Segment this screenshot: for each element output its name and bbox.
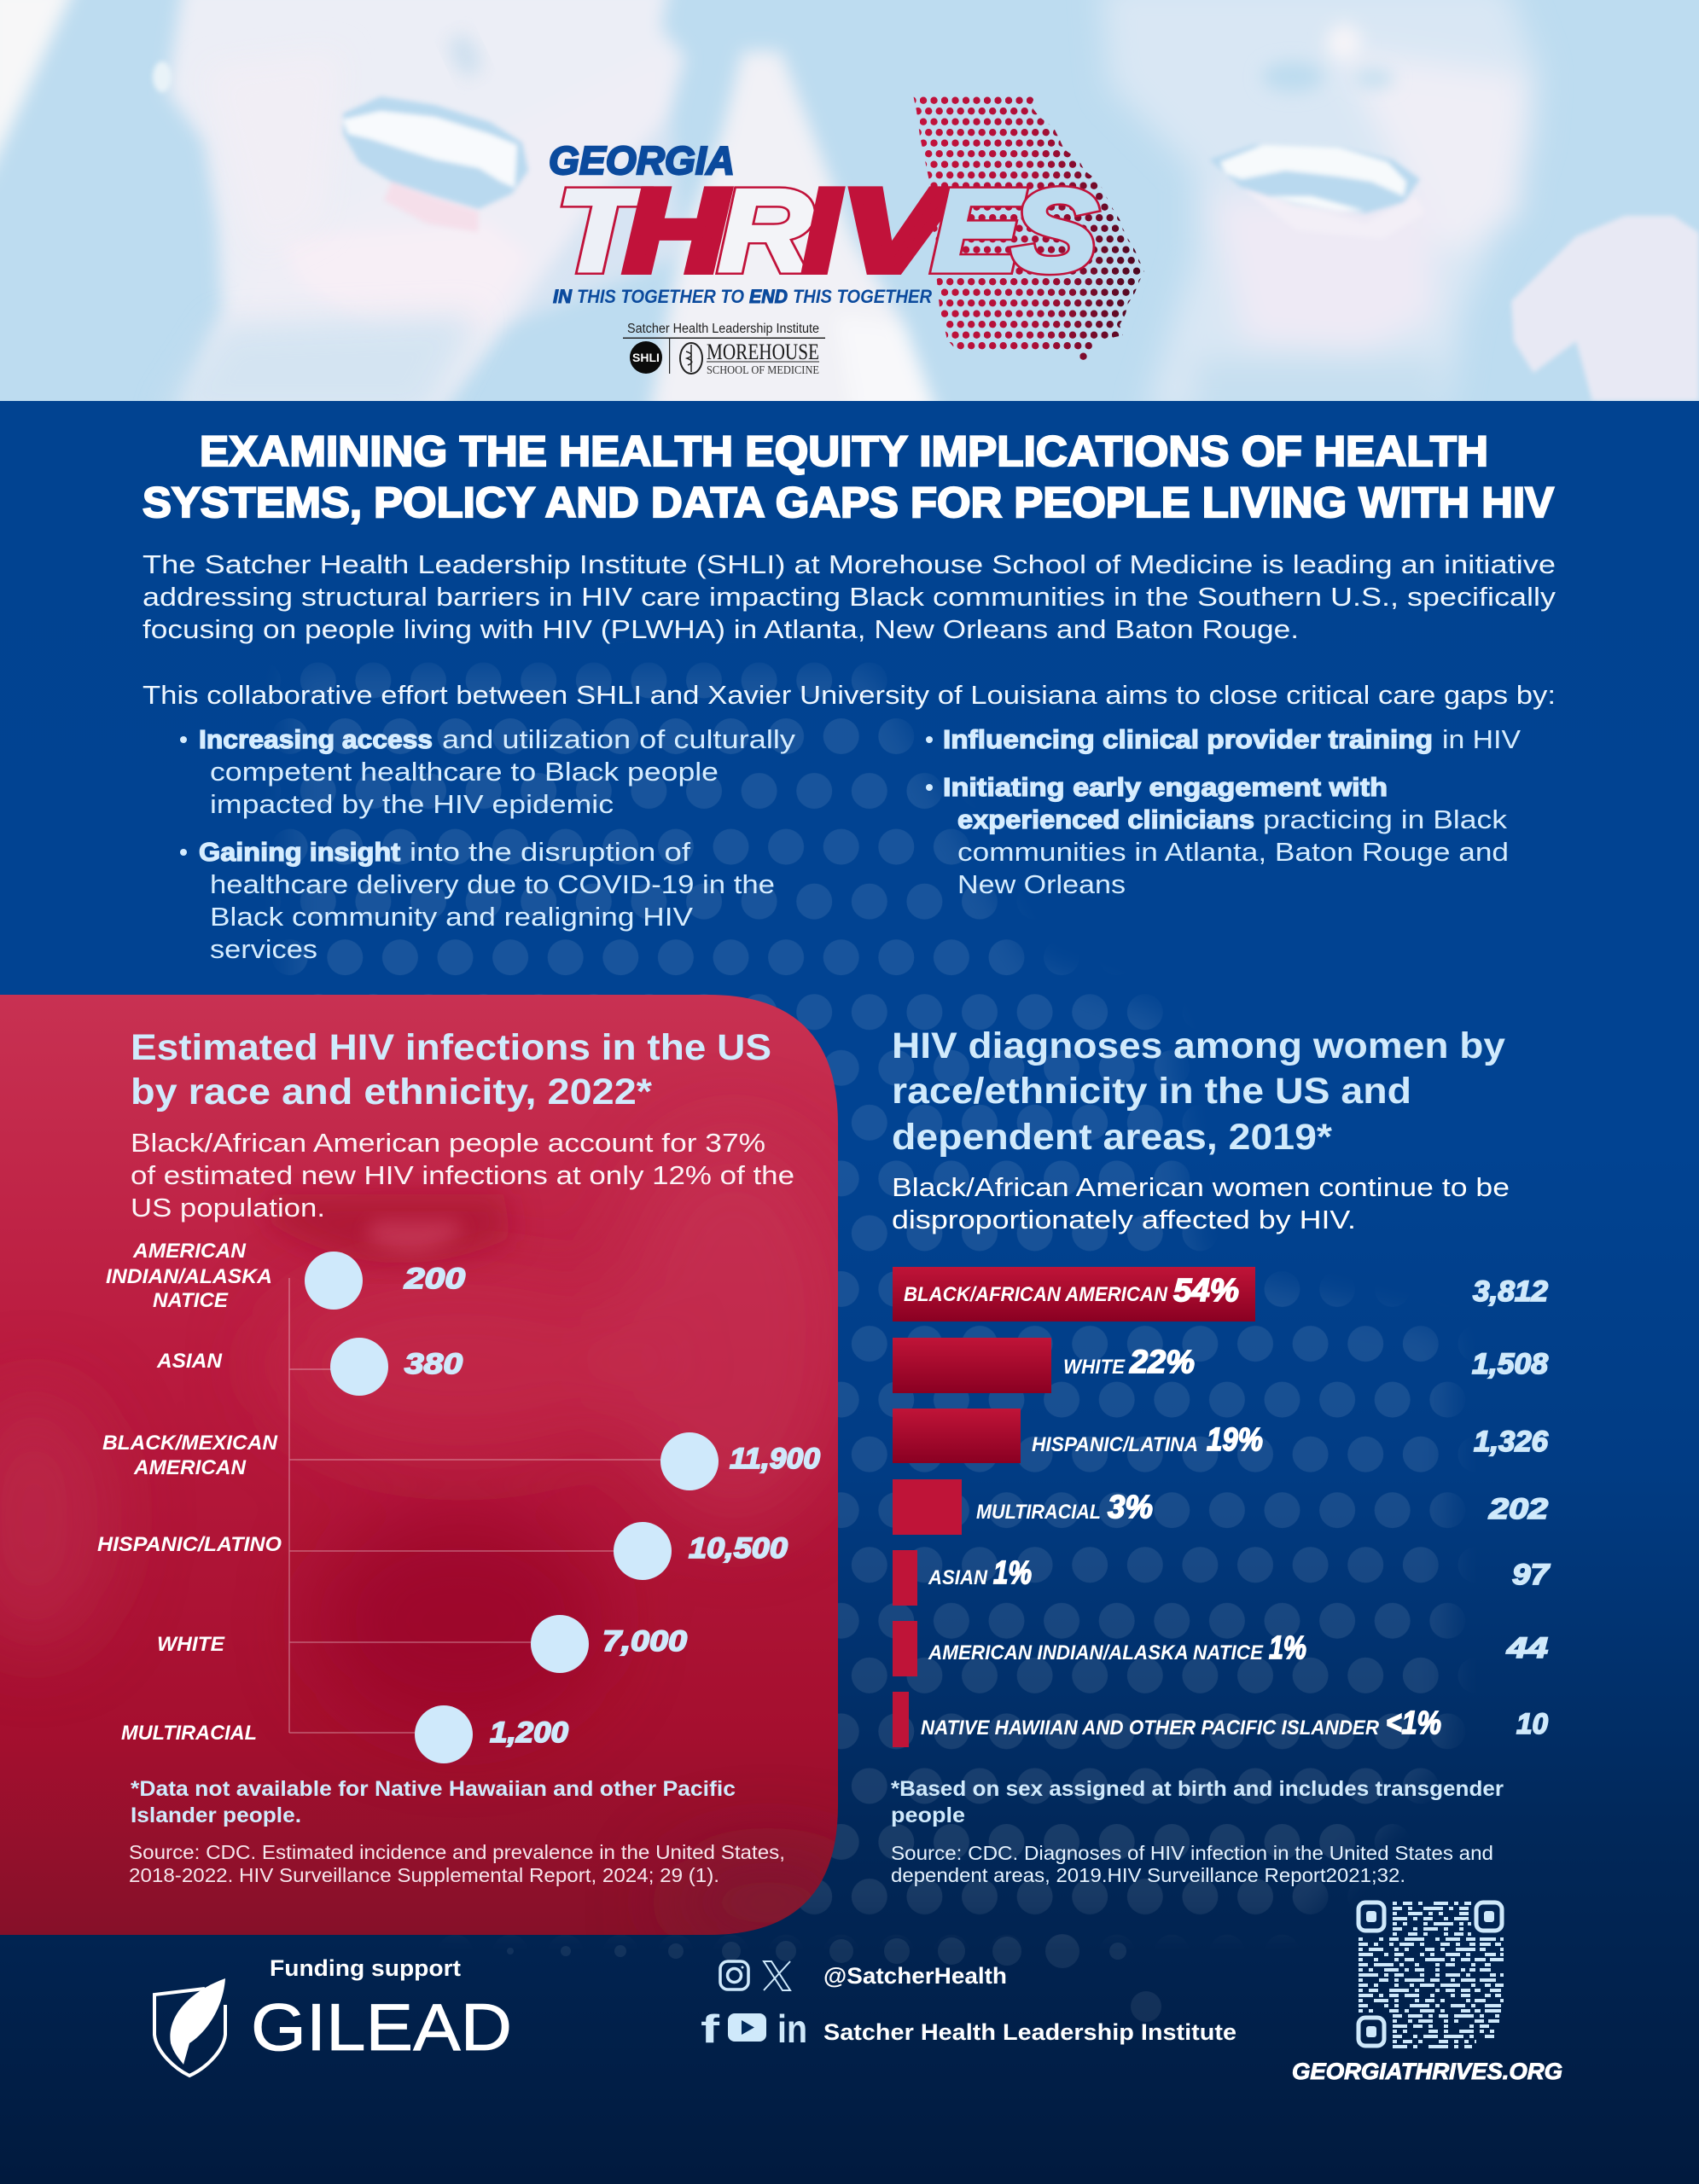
logo word: THRIVES: S	[1012, 166, 1097, 295]
bar: Hispanic/Latina: HISPANIC/LATINA	[1032, 1433, 1198, 1456]
logo word: THRIVES: E	[932, 166, 1025, 295]
row: American Indian/Alaska Natice	[106, 1240, 465, 1312]
bar: Hispanic/Latina: 19%	[1207, 1422, 1263, 1458]
main title	[143, 427, 1555, 526]
lollipop chart	[97, 1240, 820, 1763]
panel footnote: Islander people.	[131, 1804, 301, 1827]
right smiling mouth	[1210, 143, 1421, 215]
QR code	[1359, 1902, 1504, 2047]
central light streak	[649, 51, 939, 418]
bar: Asian	[893, 1550, 1551, 1606]
intro paragraph: addressing structural barriers in HIV care impacting Black communities in the Southern U.S., specifically	[143, 582, 1556, 612]
row: American Indian/Alaska Natice: 200	[404, 1263, 465, 1295]
social media handles: Satcher Health Leadership Institute	[823, 2019, 1236, 2045]
logo word: THRIVES	[556, 166, 1097, 295]
bar chart	[893, 1267, 1551, 1747]
bullet list: right column: Influencing clinical provider training	[943, 724, 1433, 754]
main title: SYSTEMS, POLICY AND DATA GAPS FOR PEOPLE LIVING WITH HIV	[143, 479, 1555, 526]
logo tagline: END	[749, 286, 788, 307]
bar: Asian: 97	[1512, 1559, 1551, 1591]
bullet list: right column: communities in Atlanta, Baton Rouge and	[957, 837, 1509, 867]
bar: Black/African American: BLACK/AFRICAN AMERICAN	[904, 1283, 1168, 1306]
panel description	[892, 1172, 1510, 1234]
bullet list: left column: and utilization of culturally	[442, 724, 796, 754]
bar: Black/African American	[893, 1267, 1548, 1321]
bar: White: WHITE	[1063, 1356, 1126, 1379]
right woman: skin tones	[1101, 0, 1539, 418]
funding support: Funding support	[270, 1955, 461, 1981]
panel source: Source: CDC. Estimated incidence and prevalence in the United States,	[129, 1841, 785, 1863]
icon: YouTube	[728, 2013, 766, 2042]
main title: EXAMINING THE HEALTH EQUITY IMPLICATIONS OF HEALTH	[200, 427, 1488, 475]
bar: Hispanic/Latina: 1,326	[1474, 1426, 1549, 1458]
logo: Georgia Thrives	[549, 85, 1152, 377]
icon: X	[764, 1961, 790, 1990]
row: Hispanic/Latino: 10,500	[689, 1532, 788, 1565]
header photo of two smiling women	[0, 0, 1699, 418]
bullet list: left column: healthcare delivery due to COVID-19 in the	[210, 869, 775, 899]
icon: LinkedIn: in	[777, 2007, 807, 2051]
bullet list: right column: in HIV	[1442, 724, 1521, 754]
logo tagline: IN	[553, 286, 573, 307]
panel source: dependent areas, 2019.HIV Surveillance Report2021;32.	[891, 1864, 1405, 1886]
row: White	[157, 1615, 687, 1673]
row: Multiracial	[121, 1705, 568, 1763]
bar: White: 1,508	[1472, 1348, 1548, 1380]
icon: Gilead shield	[154, 1978, 225, 2076]
row: Black/Mexican American: BLACK/MEXICAN	[102, 1432, 278, 1455]
hand	[1511, 216, 1699, 401]
bullet list: right column: New Orleans	[957, 869, 1126, 899]
panel source: Source: CDC. Diagnoses of HIV infection in the United States and	[891, 1842, 1493, 1864]
logo tagline	[553, 286, 932, 307]
panel description	[131, 1128, 794, 1223]
bar: Black/African American: 54%	[1173, 1273, 1239, 1309]
bullet list: left column: services	[210, 934, 317, 964]
bar: Asian: ASIAN	[928, 1566, 988, 1589]
bar: Hispanic/Latina	[893, 1409, 1549, 1463]
funding support: GILEAD	[251, 1989, 512, 2065]
logo word: THRIVES: R	[719, 166, 812, 295]
bullet list: right column: experienced clinicians	[957, 804, 1254, 834]
panel footnote: *Data not available for Native Hawaiian and other Pacific	[131, 1777, 736, 1801]
panel description: disproportionately affected by HIV.	[892, 1205, 1356, 1234]
bullet list: right column: practicing in Black	[1263, 804, 1508, 834]
panel source: 2018-2022. HIV Surveillance Supplemental Report, 2024; 29 (1).	[129, 1864, 719, 1886]
bar: White: 22%	[1129, 1345, 1195, 1380]
bar: Multiracial: 3%	[1108, 1490, 1153, 1525]
row: Black/Mexican American: 11,900	[730, 1443, 820, 1475]
panel heading: by race and ethnicity, 2022*	[131, 1072, 652, 1112]
row: White: WHITE	[157, 1633, 225, 1656]
bullet list: right column	[926, 724, 1521, 899]
left smiling mouth	[343, 96, 528, 232]
logo word: THRIVES: T	[556, 166, 648, 295]
logo word: THRIVES: E	[932, 166, 1025, 295]
panel source	[891, 1842, 1493, 1886]
bar: Native Hawaiian and other Pacific Islander: 10	[1516, 1708, 1548, 1740]
row: Black/Mexican American: AMERICAN	[133, 1456, 247, 1479]
panel description: Black/African American people account for 37%	[131, 1128, 765, 1158]
social media handles	[701, 1961, 1236, 2051]
panel: estimated HIV infections	[0, 995, 870, 1954]
bullet list: left column	[180, 724, 796, 964]
icon: Facebook: f	[701, 2007, 720, 2051]
logo word: THRIVES: I	[804, 166, 841, 295]
partner logos: SHLI and Morehouse	[623, 322, 825, 377]
row: Asian	[156, 1338, 463, 1396]
left woman: skin and neck tones	[0, 0, 685, 418]
logo word: THRIVES: S	[1012, 166, 1097, 295]
right nose	[1262, 24, 1394, 92]
bar: American Indian/Alaska Natice: 1%	[1269, 1630, 1306, 1666]
panel heading: race/ethnicity in the US and	[892, 1071, 1411, 1112]
bar: Black/African American: 3,812	[1473, 1275, 1548, 1308]
panel heading	[131, 1027, 771, 1112]
partner logos: SHLI and Morehouse: SCHOOL OF MEDICINE	[707, 364, 819, 377]
intro paragraph: The Satcher Health Leadership Institute (SHLI) at Morehouse School of Medicine is leading an initiative	[143, 549, 1556, 579]
panel description: Black/African American women continue to be	[892, 1172, 1510, 1202]
bar: Native Hawaiian and other Pacific Islander	[893, 1692, 1548, 1747]
bar: American Indian/Alaska Natice: AMERICAN INDIAN/ALASKA NATICE	[928, 1641, 1264, 1664]
collaborative effort lead-in: This collaborative effort between SHLI and Xavier University of Louisiana aims to close critical care gaps by:	[143, 680, 1556, 710]
panel footnote: people	[891, 1804, 965, 1827]
left nose shadow	[445, 32, 485, 78]
logo word: THRIVES: V	[841, 166, 957, 295]
panel footnote	[891, 1777, 1504, 1827]
panel description: US population.	[131, 1193, 325, 1223]
intro paragraph	[143, 549, 1556, 644]
bullet list: left column: Increasing access	[199, 724, 433, 754]
row: Hispanic/Latino	[97, 1522, 788, 1580]
bar: Multiracial: MULTIRACIAL	[976, 1501, 1101, 1524]
row: Hispanic/Latino: HISPANIC/LATINO	[97, 1533, 282, 1556]
row: Black/Mexican American	[102, 1432, 820, 1490]
row: Multiracial: MULTIRACIAL	[121, 1722, 257, 1745]
panel heading: Estimated HIV infections in the US	[131, 1027, 771, 1068]
social media handles: @SatcherHealth	[823, 1963, 1007, 1989]
website URL: GEORGIATHRIVES.ORG	[1292, 2059, 1562, 2084]
bar: Native Hawaiian and other Pacific Islander: <1%	[1386, 1705, 1441, 1741]
row: Asian: 380	[404, 1348, 463, 1380]
bar: American Indian/Alaska Natice	[893, 1621, 1548, 1676]
halftone dots background	[285, 663, 1456, 2022]
bar: White	[893, 1338, 1548, 1393]
logo word: THRIVES: R	[719, 166, 812, 295]
row: White: 7,000	[602, 1625, 687, 1658]
bar: American Indian/Alaska Natice: 44	[1506, 1632, 1548, 1664]
panel heading: dependent areas, 2019*	[892, 1117, 1332, 1158]
bullet list: left column: into the disruption of	[410, 837, 690, 867]
partner logos: SHLI and Morehouse: Satcher Health Leadership Institute	[627, 322, 819, 336]
logo tagline: THIS TOGETHER TO	[577, 286, 744, 307]
logo word: THRIVES: T	[556, 166, 648, 295]
bullet list: left column: impacted by the HIV epidemic	[210, 789, 614, 819]
partner logos: SHLI and Morehouse: SHLI	[632, 351, 660, 364]
bullet list: left column: Black community and realigning HIV	[210, 902, 693, 932]
panel heading: HIV diagnoses among women by	[892, 1025, 1505, 1066]
partner logos: SHLI and Morehouse: MOREHOUSE	[707, 340, 819, 364]
panel footnote: *Based on sex assigned at birth and includes transgender	[891, 1777, 1504, 1801]
panel heading	[892, 1025, 1505, 1158]
bar: Multiracial	[893, 1479, 1548, 1535]
earring	[153, 61, 172, 92]
bullet list: left column: Gaining insight	[199, 837, 400, 867]
row: Asian: ASIAN	[156, 1350, 223, 1373]
row: American Indian/Alaska Natice: INDIAN/ALASKA	[106, 1265, 272, 1288]
panel photo background	[0, 995, 870, 1954]
bar: Asian: 1%	[993, 1555, 1032, 1591]
bullet list: right column: Initiating early engagement with	[943, 772, 1388, 802]
logo tagline: THIS TOGETHER	[793, 286, 932, 307]
bar: Native Hawaiian and other Pacific Islander: NATIVE HAWIIAN AND OTHER PACIFIC ISLANDER	[921, 1716, 1380, 1740]
row: American Indian/Alaska Natice: AMERICAN	[132, 1240, 247, 1263]
row: Multiracial: 1,200	[490, 1716, 568, 1749]
logo word: GEORGIA: GEORGIA	[549, 138, 735, 183]
bar: Multiracial: 202	[1488, 1493, 1548, 1525]
bullet list: left column: competent healthcare to Black people	[210, 757, 719, 787]
intro paragraph: focusing on people living with HIV (PLWHA) in Atlanta, New Orleans and Baton Rouge.	[143, 614, 1299, 644]
panel description: of estimated new HIV infections at only 12% of the	[131, 1160, 794, 1190]
logo word: THRIVES: H	[625, 166, 728, 295]
funding support	[154, 1955, 512, 2076]
icon: Instagram	[720, 1961, 748, 1989]
row: American Indian/Alaska Natice: NATICE	[153, 1289, 229, 1312]
Georgia state halftone map	[913, 97, 1144, 360]
panel: HIV diagnoses among women	[891, 1025, 1551, 1886]
panel footnote	[131, 1777, 736, 1827]
panel source	[129, 1841, 785, 1886]
